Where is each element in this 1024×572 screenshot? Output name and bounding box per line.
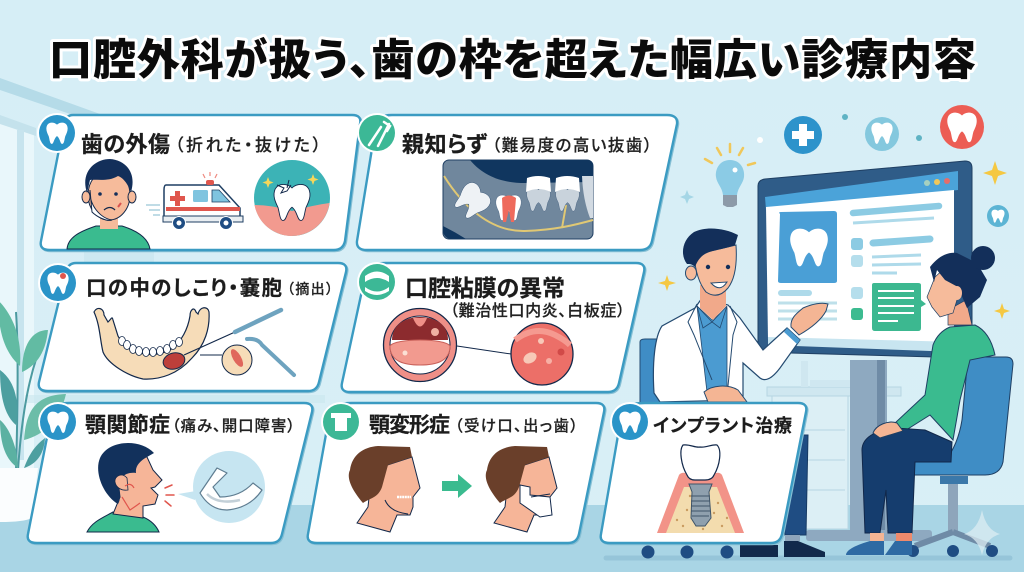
doctor hand xyxy=(791,303,828,335)
heading: 親知らず xyxy=(402,132,488,157)
illustration: jaw with cyst xyxy=(94,308,209,379)
doctor trousers xyxy=(770,435,808,535)
illustration: mucosa close-up xyxy=(511,323,573,385)
heading: 顎変形症 xyxy=(369,414,450,437)
panel: 口の中のしこり・嚢胞 xyxy=(38,263,346,391)
floating medical icons xyxy=(658,105,1010,319)
illustration: open mouth xyxy=(384,308,456,382)
subheading: （痛み、開口障害） xyxy=(172,417,295,435)
panel: 顎関節症 xyxy=(28,402,312,543)
panel: インプラント治療 xyxy=(601,402,806,543)
title: 口腔外科が扱う、歯の枠を超えた幅広い診療内容 xyxy=(49,36,976,85)
icon: plus badge xyxy=(784,116,822,154)
illustration: wisdom tooth x-ray xyxy=(443,160,593,239)
subheading: （折れた・抜けた） xyxy=(175,136,321,155)
screen tooth tile xyxy=(778,211,837,283)
illustration: scalpel xyxy=(184,310,281,355)
illustration: profile before xyxy=(349,446,420,532)
patient hand xyxy=(873,422,903,438)
panel: 親知らず xyxy=(357,113,677,250)
doctor chair xyxy=(640,339,734,558)
icon: small tooth badge xyxy=(987,205,1009,227)
connector line xyxy=(457,346,511,354)
illustration: implant xyxy=(657,445,744,533)
screen text lines xyxy=(778,206,939,320)
background desk xyxy=(767,361,901,529)
icon: tooth with lesion badge xyxy=(38,263,78,303)
icon: jaw badge xyxy=(321,402,361,442)
heading: インプラント治療 xyxy=(653,416,792,436)
icon: teeth badge xyxy=(357,262,397,302)
subheading: （難治性口内炎、白板症） xyxy=(450,302,625,320)
patient chair back xyxy=(892,357,1013,475)
icon: red tooth badge xyxy=(940,105,984,149)
panel: 顎変形症 xyxy=(308,402,604,543)
illustration: jaw pain profile xyxy=(87,443,174,532)
plant xyxy=(0,300,66,522)
icon: light tooth badge xyxy=(865,117,899,151)
subheading: （難易度の高い抜歯） xyxy=(492,136,652,155)
monitor xyxy=(758,161,972,541)
illustration: cyst close-up xyxy=(200,345,252,375)
illustration: mouth guard bubble xyxy=(178,451,265,523)
teeth xyxy=(450,179,494,223)
icon: tooth badge xyxy=(37,113,77,153)
heading: 口腔粘膜の異常 xyxy=(405,275,565,301)
screen green note xyxy=(872,283,926,331)
icon: tooth badge xyxy=(38,402,78,442)
patient chair base xyxy=(907,476,998,557)
corner sparkle xyxy=(964,510,1000,555)
monitor stand xyxy=(806,360,932,541)
illustration: profile after xyxy=(486,446,557,532)
heading: 口の中のしこり・嚢胞 xyxy=(86,277,282,300)
teeth row xyxy=(118,336,182,356)
illustration: cracked tooth xyxy=(254,160,330,236)
patient xyxy=(846,246,1013,557)
icon: tooth badge xyxy=(610,402,650,442)
patient legs xyxy=(862,428,952,533)
panel: 口腔粘膜の異常 xyxy=(342,262,644,392)
heading: 顎関節症 xyxy=(85,414,170,437)
panel: 歯の外傷 xyxy=(37,113,360,250)
doctor head xyxy=(683,228,738,320)
icon: dental tool badge xyxy=(357,113,397,153)
arrow xyxy=(442,474,472,498)
subheading: （摘出） xyxy=(287,281,333,297)
illustration: tweezers xyxy=(247,339,294,375)
subheading: （受け口、出っ歯） xyxy=(455,416,578,435)
heading: 歯の外傷 xyxy=(81,132,170,157)
illustration: ambulance xyxy=(146,172,243,230)
doctor coat xyxy=(653,298,800,402)
icon: light bulb xyxy=(705,144,755,207)
patient head xyxy=(927,246,995,325)
doctor shoes xyxy=(740,535,825,557)
doctor xyxy=(640,228,828,558)
patient torso xyxy=(895,325,995,440)
patient feet xyxy=(846,533,912,555)
illustration: injured person xyxy=(67,159,150,249)
